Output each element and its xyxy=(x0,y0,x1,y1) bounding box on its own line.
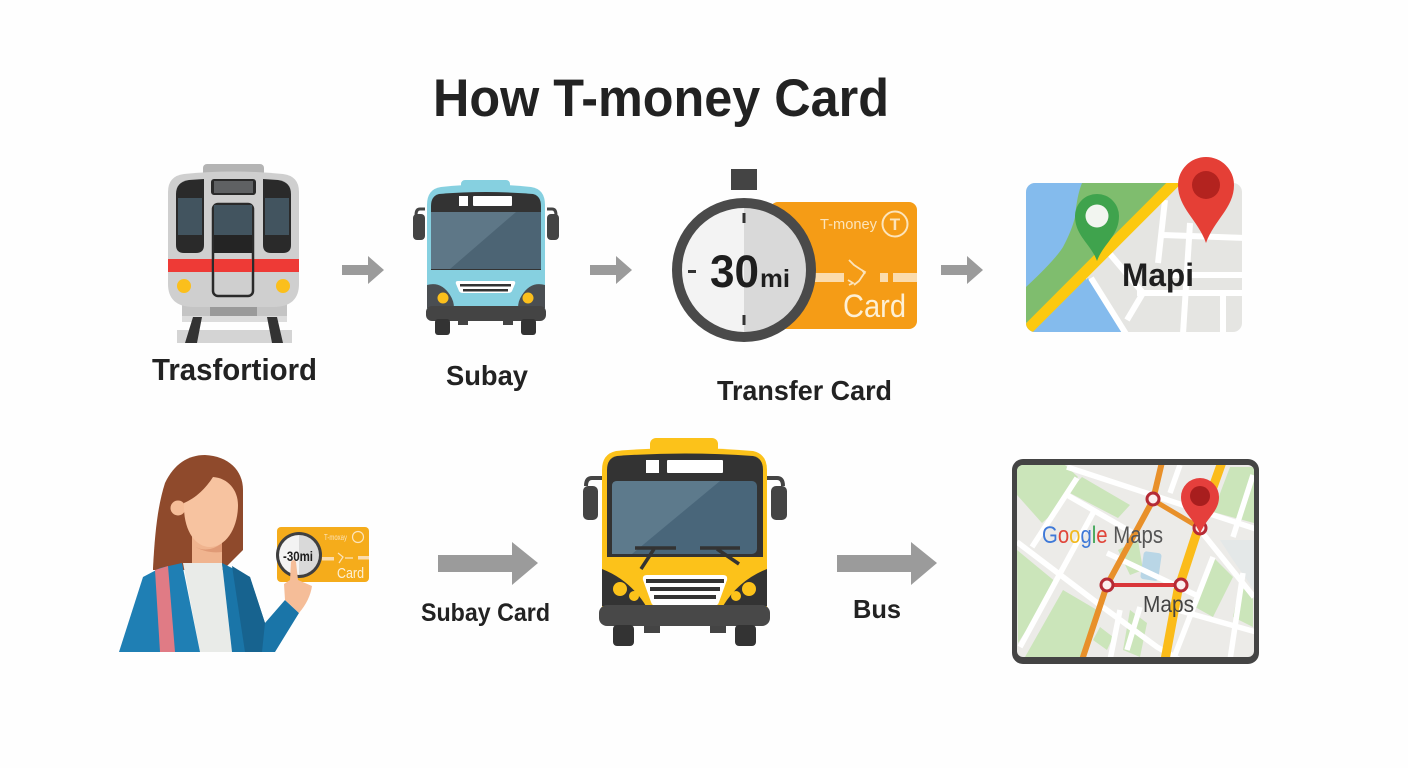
label: Trasfortiord: Trasfortiord xyxy=(152,352,317,387)
icon: yellow bus xyxy=(583,438,787,646)
label: Bus: Bus xyxy=(853,594,901,624)
icon: person holding card xyxy=(119,455,369,652)
icon: map with pins: Mapi xyxy=(1122,257,1194,293)
text: Google Maps: Google Maps xyxy=(1042,522,1163,549)
label: Subay: Subay xyxy=(446,360,528,391)
mini card: -30mi xyxy=(283,548,313,564)
arrow 5 xyxy=(837,542,937,585)
arrow 4 xyxy=(438,542,538,585)
mini card xyxy=(276,527,369,582)
icon: blue bus xyxy=(413,180,559,335)
icon: transfer card with stopwatch: T-money xyxy=(820,216,877,233)
text: Maps: Maps xyxy=(1143,591,1194,617)
title: How T-money Card xyxy=(433,69,889,128)
icon: transfer card with stopwatch xyxy=(672,169,917,342)
arrow 2 xyxy=(590,256,632,284)
label: Subay Card: Subay Card xyxy=(421,599,550,627)
arrow 3 xyxy=(941,256,983,284)
icon: transfer card with stopwatch: T xyxy=(890,215,901,234)
icon: subway train xyxy=(168,164,299,343)
arrow 1 xyxy=(342,256,384,284)
icon: map with pins xyxy=(1026,157,1245,334)
icon: transfer card with stopwatch: mi xyxy=(760,265,790,293)
icon: transfer card with stopwatch: 30 xyxy=(710,246,759,297)
mini card: T-moxay xyxy=(324,533,347,542)
mini card: Card xyxy=(337,565,364,582)
icon: transfer card with stopwatch: Card xyxy=(843,288,906,324)
icon: tablet with Google Maps xyxy=(1012,459,1259,664)
label: Transfer Card: Transfer Card xyxy=(717,375,892,406)
